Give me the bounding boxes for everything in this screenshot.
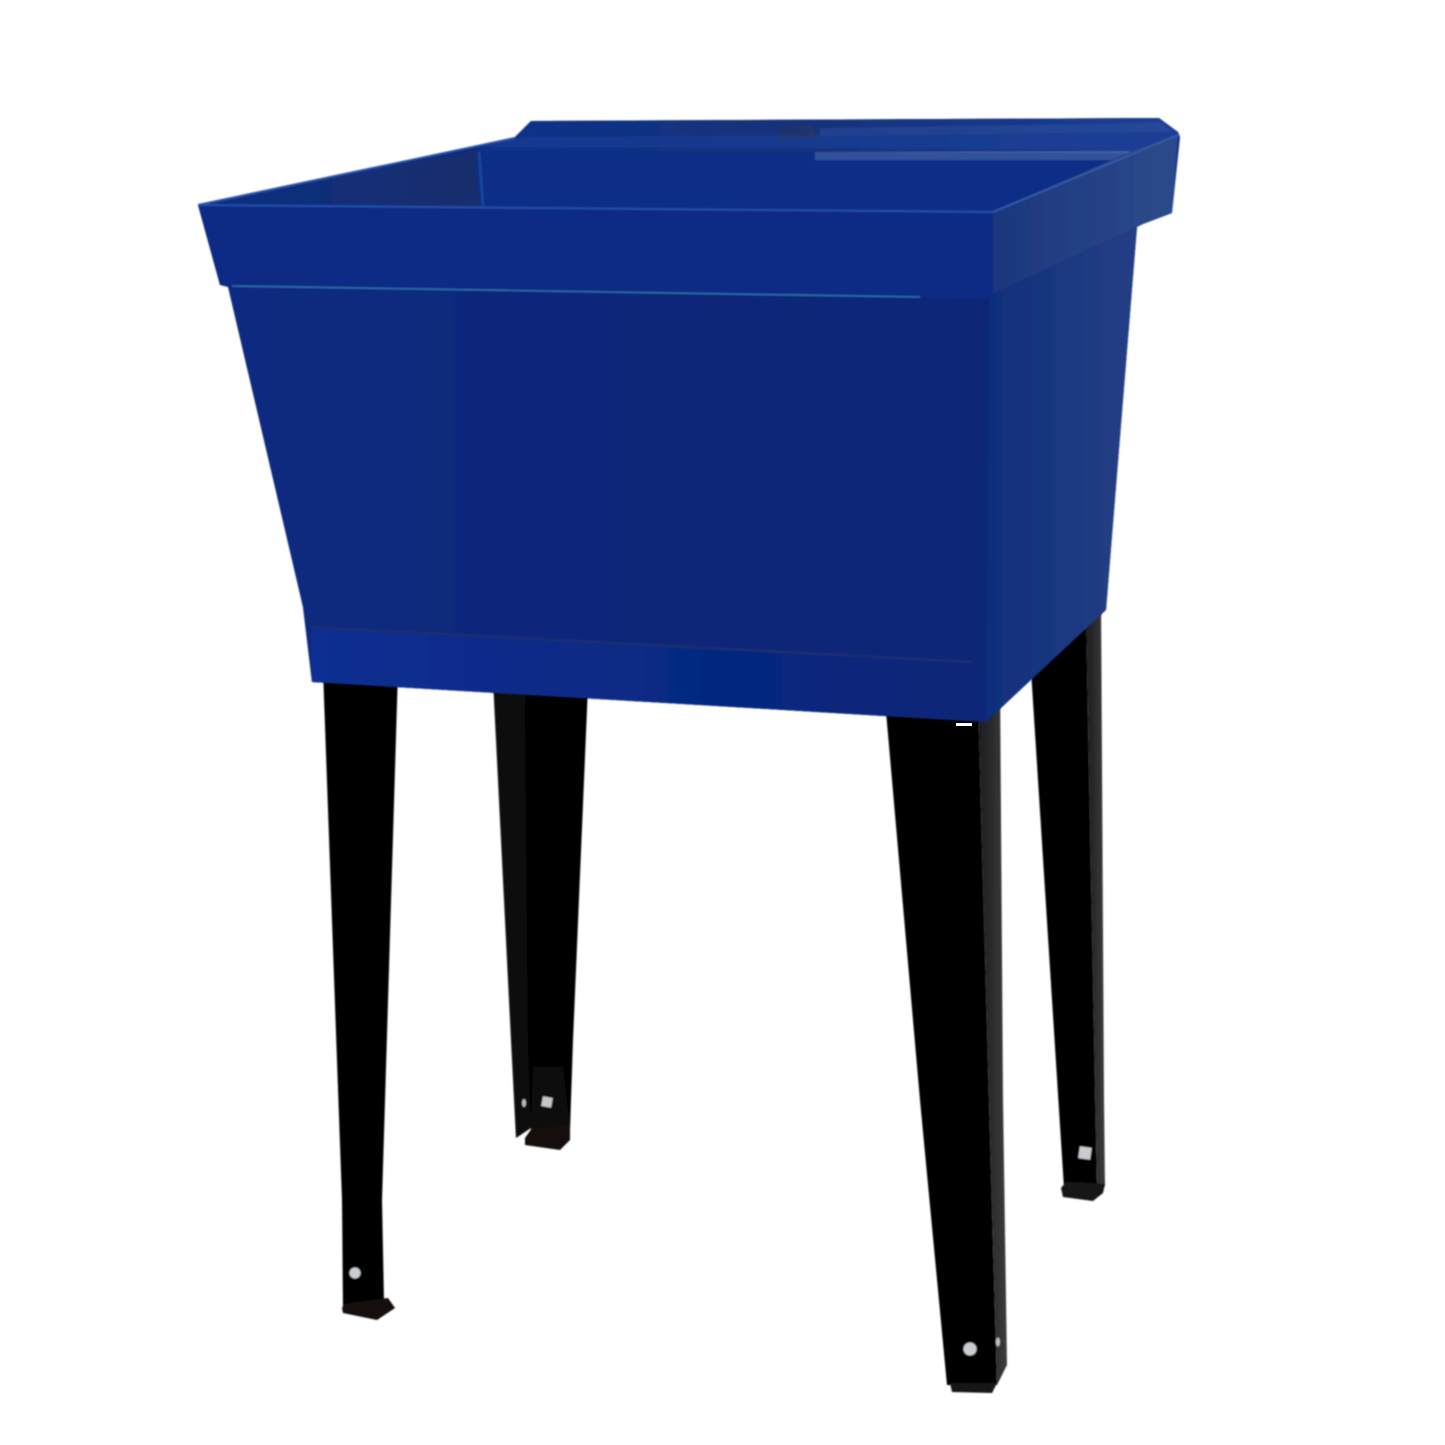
front right leg bolt [964,1342,976,1356]
rim right side [993,134,1178,293]
rim right top edge [993,135,1178,212]
tub silhouette underlay [198,118,1180,722]
rim left top edge [198,138,515,205]
interior back wall [475,151,1130,212]
body front face [228,285,990,722]
front left foot [342,1298,395,1320]
rim underside highlight [232,286,920,297]
back splash ledge [475,118,1180,153]
front right foot [950,1383,997,1393]
front rim top highlight [198,205,993,212]
rear right foot [1061,1182,1105,1201]
ledge highlights [480,122,1175,160]
rear left foot [525,1126,570,1150]
white gap at body corner [956,723,972,726]
rear right leg [1031,600,1105,1201]
rear right bracket bolt [1078,1146,1092,1160]
lower groove [311,627,972,662]
lower front band [311,627,986,722]
front right leg hole [996,1338,1000,1346]
interior left wall [198,150,480,208]
rear left bracket bolt [541,1096,553,1108]
front rim [198,205,993,299]
front left leg [323,670,398,1320]
body right side [986,215,1140,722]
interior corner seam [479,152,483,206]
tub [198,118,1180,722]
front left leg bolt [350,1268,360,1278]
rear left leg hole [522,1099,526,1107]
rear left leg [493,680,588,1150]
front right leg [885,680,1007,1393]
